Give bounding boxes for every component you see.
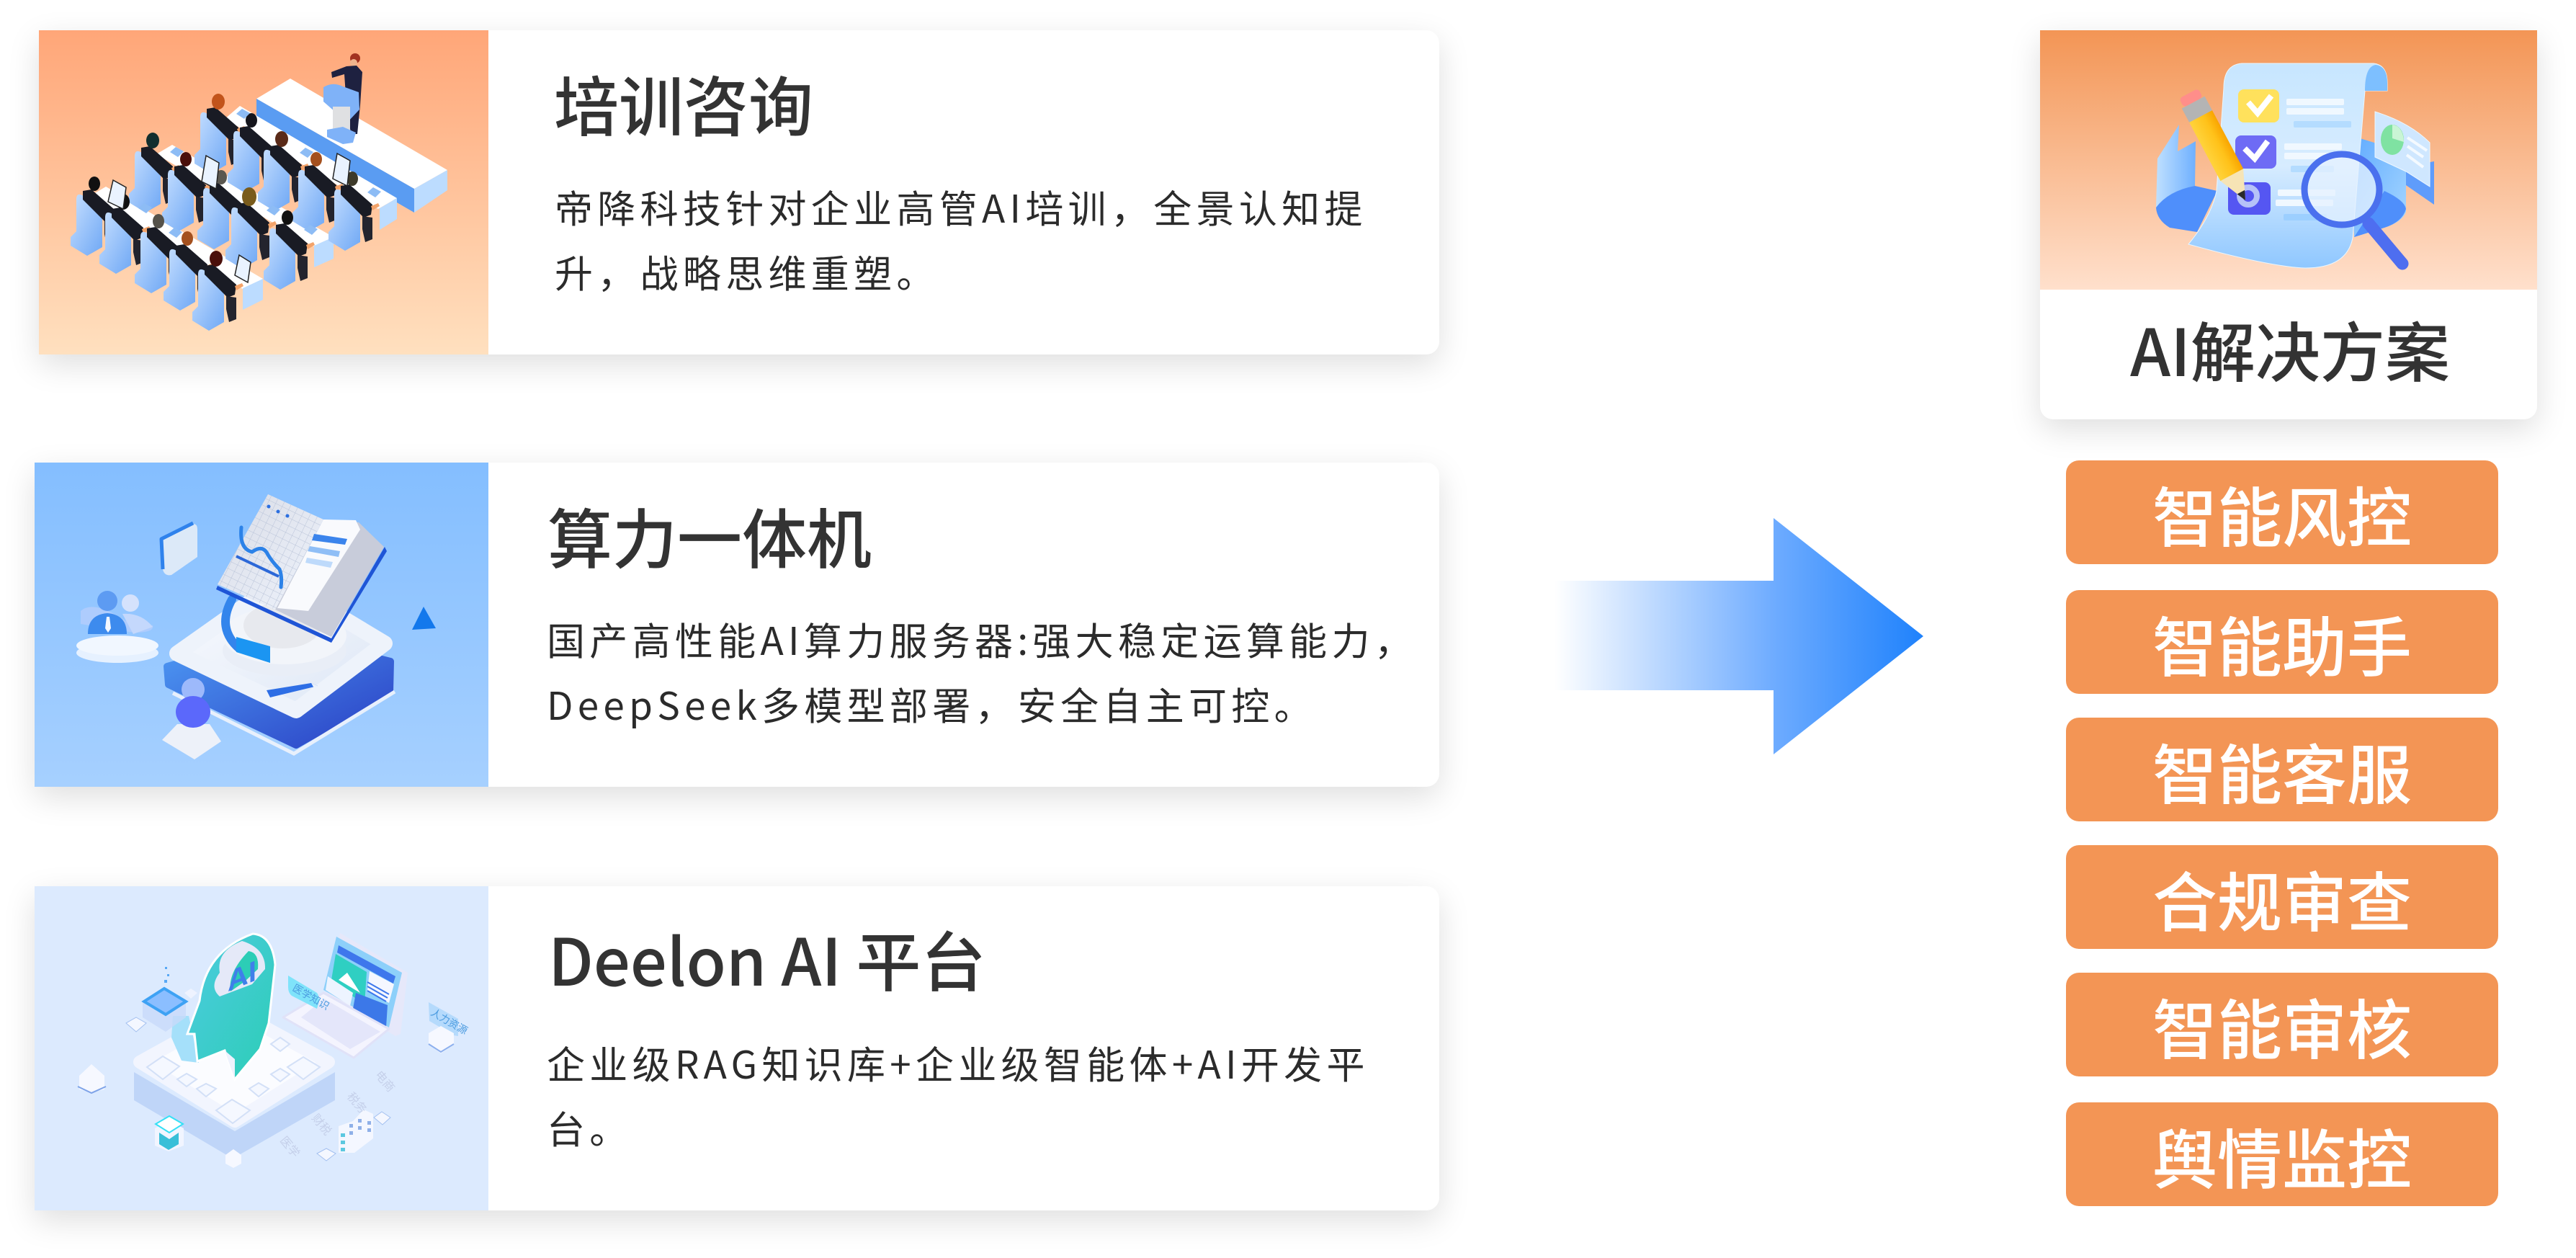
description: [547, 612, 1417, 731]
floating tags: [288, 976, 470, 1038]
description: 升，战略思维重塑。: [555, 244, 939, 299]
tag: smart audit: [2066, 973, 2498, 1076]
people on pedestal: [76, 591, 158, 663]
checkbox target: [2228, 182, 2271, 215]
tag: smart customer service: [2066, 718, 2498, 821]
blue ribbon: [2156, 125, 2434, 237]
checklist lines: [2276, 99, 2351, 220]
floating tile: [161, 523, 197, 575]
tag: public opinion monitoring: 舆情监控: [2152, 1108, 2412, 1202]
tag: smart risk control: [2066, 460, 2498, 564]
shield cube: [155, 1116, 184, 1151]
pencil: [2177, 87, 2257, 206]
AI mark: AI: [228, 954, 256, 998]
heading: 培训咨询: [554, 55, 813, 149]
cubes: [78, 989, 454, 1168]
faint industry labels: 电商: [372, 1066, 400, 1095]
heading: 算力一体机: [547, 488, 872, 581]
description: 帝降科技针对企业高管AI培训，全景认知提: [555, 179, 1367, 234]
chart panel: [2375, 112, 2430, 187]
ring and sphere: [223, 599, 346, 676]
tag: compliance review: 合规审查: [2152, 851, 2412, 945]
head silhouette: [171, 934, 275, 1079]
tag: smart assistant: 智能助手: [2152, 596, 2412, 690]
floating tags: 人力资源: [428, 1005, 470, 1038]
laptops and papers: [108, 109, 381, 282]
illustration: book on platform: [35, 463, 488, 787]
description: 台。: [547, 1100, 632, 1155]
tag: smart risk control: 智能风控: [2152, 466, 2412, 560]
laptop: [283, 933, 408, 1058]
heading: Deelon AI 平台: [548, 911, 985, 1004]
glowing chip: [143, 967, 186, 1032]
tag: compliance review: [2066, 845, 2498, 949]
tag: public opinion monitoring: [2066, 1102, 2498, 1206]
platform shadow: [134, 1072, 335, 1159]
speaker at podium: [323, 53, 362, 144]
panel: AI solutions card: [2040, 30, 2537, 419]
panel: Deelon AI platform card: [35, 886, 1439, 1210]
faint industry labels: 财税: [308, 1110, 336, 1138]
pencil: [267, 683, 318, 697]
illustration: isometric conference room: [39, 30, 488, 354]
panel: compute appliance card: [35, 463, 1439, 787]
illustration: checklist with pencil and magnifier: [2040, 30, 2537, 290]
office building: [339, 1110, 373, 1153]
platform: [140, 1010, 328, 1121]
tag: smart audit: 智能审核: [2152, 978, 2412, 1072]
document: [2188, 63, 2387, 268]
circuit tiles: [147, 1038, 320, 1123]
arrow: [1567, 518, 1923, 754]
tag: smart assistant: [2066, 590, 2498, 694]
checkbox yellow: [2238, 89, 2279, 122]
description: [547, 1035, 1369, 1155]
platform base: [167, 581, 395, 754]
heading: AI解决方案: [2130, 301, 2450, 395]
figure on key: [162, 678, 221, 759]
description: 国产高性能AI算力服务器:强大稳定运算能力，: [547, 612, 1417, 666]
audience chairs and seated people: [71, 94, 380, 331]
floating tags: 医学知识: [290, 981, 332, 1013]
faint industry labels: 医学: [277, 1132, 305, 1161]
stage: [256, 79, 447, 213]
tag: smart customer service: 智能客服: [2152, 723, 2412, 817]
faint industry labels: [277, 1066, 400, 1161]
magnifier: [2304, 154, 2402, 264]
desks: [90, 106, 397, 310]
open book with chart: [216, 494, 387, 643]
illustration: AI head on circuit platform: [35, 886, 488, 1210]
checkbox violet: [2235, 135, 2276, 169]
description: [555, 179, 1367, 299]
faint industry labels: 税务: [344, 1088, 372, 1117]
description: DeepSeek多模型部署，安全自主可控。: [547, 677, 1317, 731]
description: 企业级RAG知识库+企业级智能体+AI开发平: [547, 1035, 1369, 1090]
panel: training consulting card: [39, 30, 1439, 354]
paper plane: [412, 607, 436, 630]
